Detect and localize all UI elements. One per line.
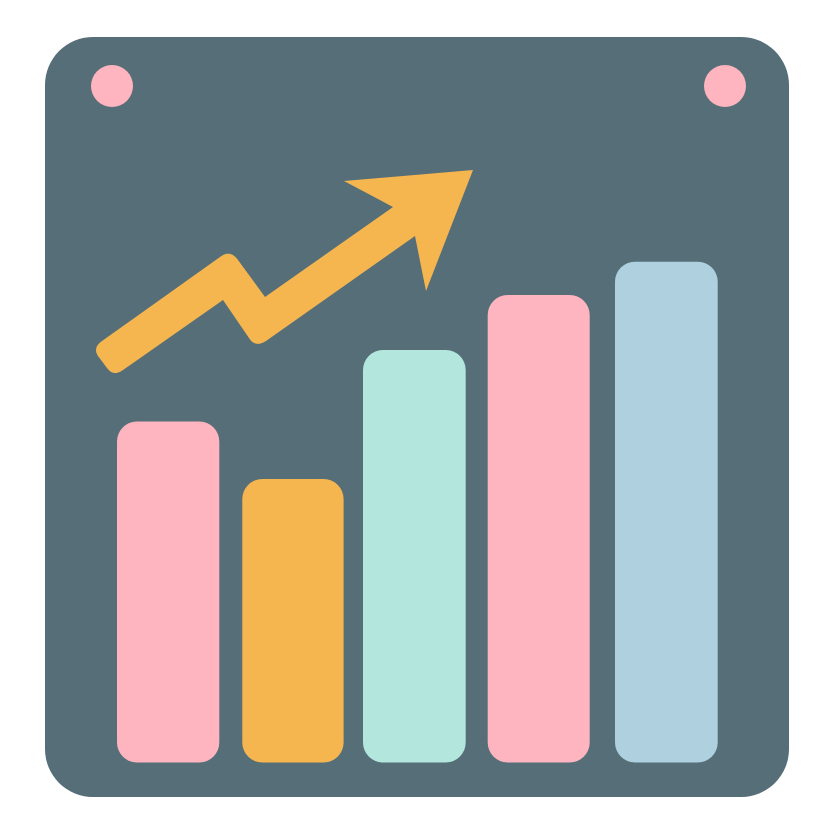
- bar 1: [117, 422, 219, 762]
- bar 2: [242, 479, 344, 762]
- arrow: rising trend: [96, 170, 473, 373]
- bar 3: [363, 350, 466, 762]
- icon: right pin: [704, 65, 746, 107]
- bar 4: [488, 295, 590, 762]
- icon: left pin: [91, 65, 133, 107]
- bar 5: [615, 262, 718, 762]
